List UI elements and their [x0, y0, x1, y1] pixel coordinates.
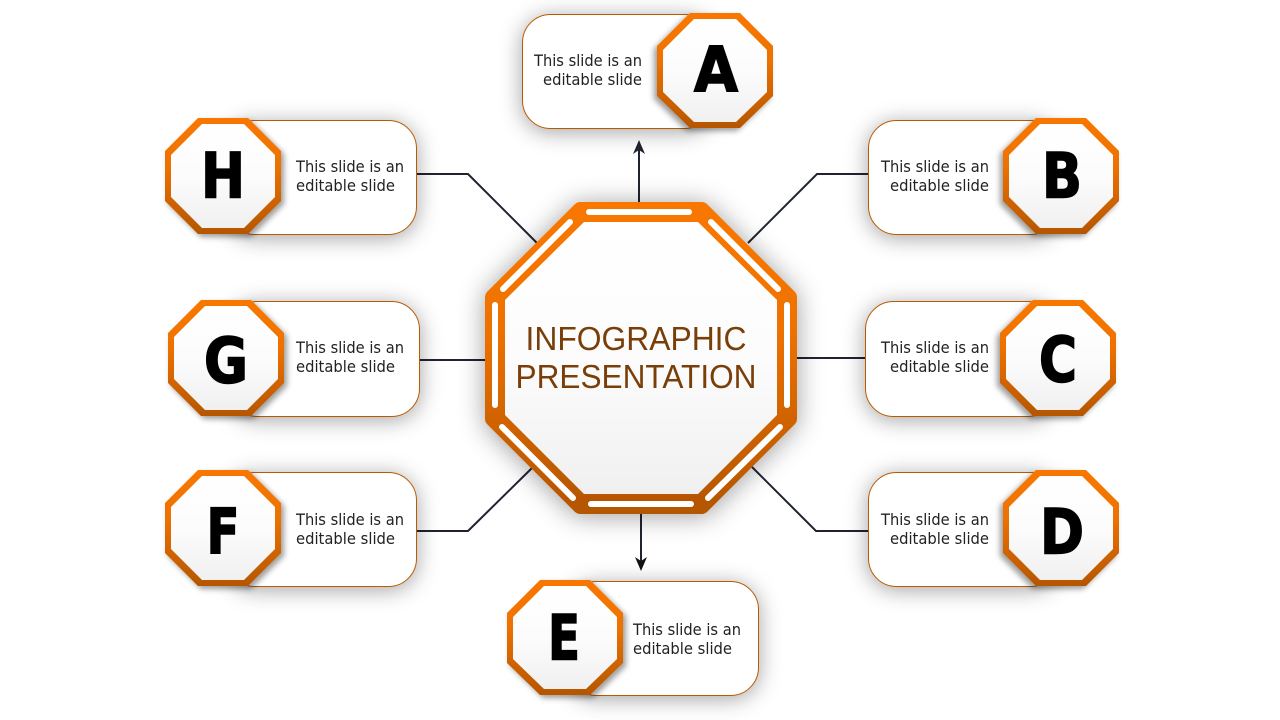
badge B: B — [1042, 140, 1082, 212]
card E — [568, 582, 758, 696]
card G — [230, 302, 420, 416]
text H — [295, 157, 404, 195]
card A — [522, 14, 712, 128]
badge G: G — [204, 324, 248, 398]
text G: This slide is an — [295, 338, 404, 357]
text C: This slide is an — [880, 338, 989, 357]
card H — [226, 120, 416, 234]
text D: editable slide — [890, 529, 989, 548]
text F: This slide is an — [295, 510, 404, 529]
card B — [868, 120, 1058, 234]
badge D — [1003, 470, 1119, 586]
connector: G — [420, 359, 486, 361]
badge D: D — [1040, 496, 1084, 568]
panel: C — [866, 300, 1116, 416]
connector: D — [752, 467, 868, 531]
text B: This slide is an — [880, 157, 989, 176]
title: PRESENTATION — [516, 358, 756, 395]
text C — [880, 338, 989, 376]
connector: F — [417, 468, 532, 531]
panel: F — [165, 470, 416, 586]
text B: editable slide — [890, 176, 989, 195]
octagon frame — [493, 210, 789, 506]
badge A — [657, 13, 773, 128]
panel: E — [507, 580, 758, 696]
badge G — [168, 300, 284, 416]
octagon face — [505, 222, 777, 494]
text A: editable slide — [543, 70, 642, 89]
badge E: E — [548, 602, 580, 674]
text E — [632, 620, 741, 658]
badge H: H — [201, 140, 245, 212]
badge C: C — [1039, 324, 1077, 396]
text E: editable slide — [633, 639, 732, 658]
arrow: to A — [633, 140, 645, 203]
connector: B — [748, 174, 868, 243]
panel: H — [165, 118, 416, 234]
text F: editable slide — [296, 529, 395, 548]
text H: This slide is an — [295, 157, 404, 176]
badge B — [1003, 118, 1119, 234]
text B — [880, 157, 989, 195]
text D: This slide is an — [880, 510, 989, 529]
text A: This slide is an — [533, 51, 642, 70]
panel: A — [522, 13, 773, 128]
central octagon — [493, 210, 789, 506]
badge C — [1000, 300, 1116, 416]
card F — [226, 472, 416, 586]
text H: editable slide — [296, 176, 395, 195]
badge A: A — [694, 34, 738, 106]
panel: G — [168, 300, 420, 416]
text E: This slide is an — [632, 620, 741, 639]
title — [516, 320, 756, 395]
connector: C — [797, 357, 865, 359]
text D — [880, 510, 989, 548]
panel: D — [868, 470, 1119, 586]
title: INFOGRAPHIC — [526, 320, 746, 357]
text C: editable slide — [890, 357, 989, 376]
frame highlights — [495, 212, 787, 504]
text F — [295, 510, 404, 548]
badge F — [165, 470, 281, 586]
card D — [868, 472, 1058, 586]
text A — [533, 51, 642, 89]
text G: editable slide — [296, 357, 395, 376]
panel: B — [868, 118, 1119, 234]
card C — [866, 302, 1056, 416]
connector: H — [417, 174, 537, 243]
arrow: to E — [635, 513, 647, 571]
badge E — [507, 580, 623, 695]
text G — [295, 338, 404, 376]
badge F: F — [206, 496, 240, 568]
badge H — [165, 118, 281, 234]
